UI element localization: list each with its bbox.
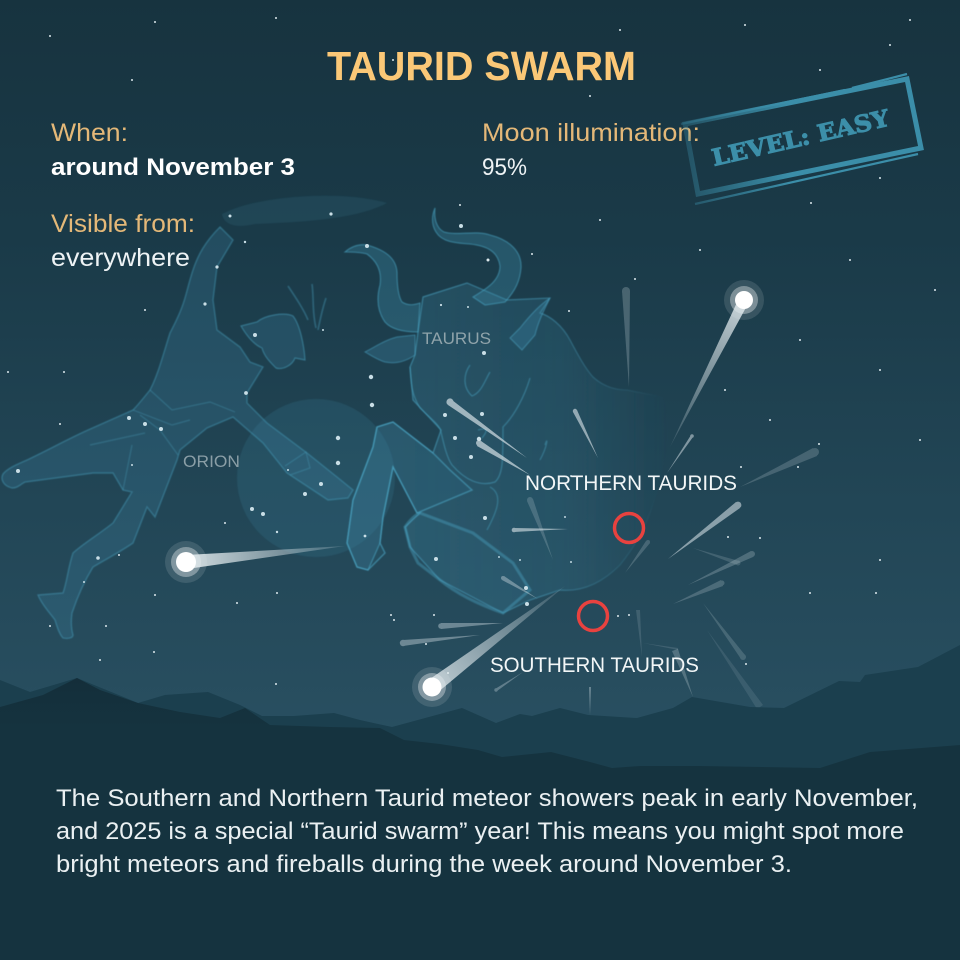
Orion hair (288, 284, 326, 330)
Taurus body (347, 283, 669, 613)
Taurus left horn (345, 245, 420, 332)
info: visible from: everywhere (51, 244, 190, 272)
Orion shield (237, 399, 395, 557)
description text (56, 785, 918, 878)
info: when (51, 119, 295, 181)
meteor: lower left fireball (165, 541, 345, 583)
info: moon illumination (482, 119, 700, 181)
Taurus rear leg (405, 513, 530, 613)
label: Southern Taurids: SOUTHERN TAURIDS (490, 654, 699, 677)
info: visible from (51, 210, 195, 272)
stamp: level easy: LEVEL: EASY (709, 105, 892, 172)
Taurus left ear (365, 335, 415, 363)
Taurus right horn (432, 208, 521, 305)
faint meteors (527, 287, 819, 709)
radiant marker: southern (578, 602, 608, 630)
meteor: upper right fireball (670, 280, 764, 447)
label: Taurus: TAURUS (422, 329, 491, 348)
Orion club (222, 196, 387, 226)
constellation: Orion (2, 196, 395, 638)
Taurus chest line (487, 441, 547, 530)
bottom panel background (0, 770, 960, 960)
constellation: Taurus (345, 208, 669, 613)
info: when: When: (51, 119, 128, 147)
Taurus face (410, 365, 530, 484)
medium meteors (400, 398, 741, 715)
meteor: bottom fireball (412, 586, 565, 707)
constellation stars (16, 212, 529, 606)
label: Orion: ORION (183, 452, 240, 471)
Orion head (241, 314, 305, 369)
description text: The Southern and Northern Taurid meteor showers peak in early November, (56, 785, 918, 812)
info: moon illumination: 95% (482, 154, 527, 181)
stamp: level easy (681, 74, 921, 204)
label: Northern Taurids: NORTHERN TAURIDS (525, 472, 737, 495)
description text: bright meteors and fireballs during the week around November 3. (56, 851, 792, 878)
title: TAURID SWARM (327, 43, 636, 89)
info: when: around November 3 (51, 154, 295, 181)
info: visible from: Visible from: (51, 210, 195, 238)
Orion details (90, 390, 310, 490)
mountains: front ridge (0, 678, 960, 800)
mountains: back ridge (0, 645, 960, 790)
radiant marker: northern (614, 514, 644, 542)
background stars (7, 17, 936, 685)
description text: and 2025 is a special “Taurid swarm” year! This means you might spot more (56, 818, 904, 845)
Taurus right ear (510, 298, 550, 350)
Taurus front leg (347, 422, 472, 570)
info: moon illumination: Moon illumination: (482, 119, 700, 147)
Orion figure (2, 227, 353, 638)
